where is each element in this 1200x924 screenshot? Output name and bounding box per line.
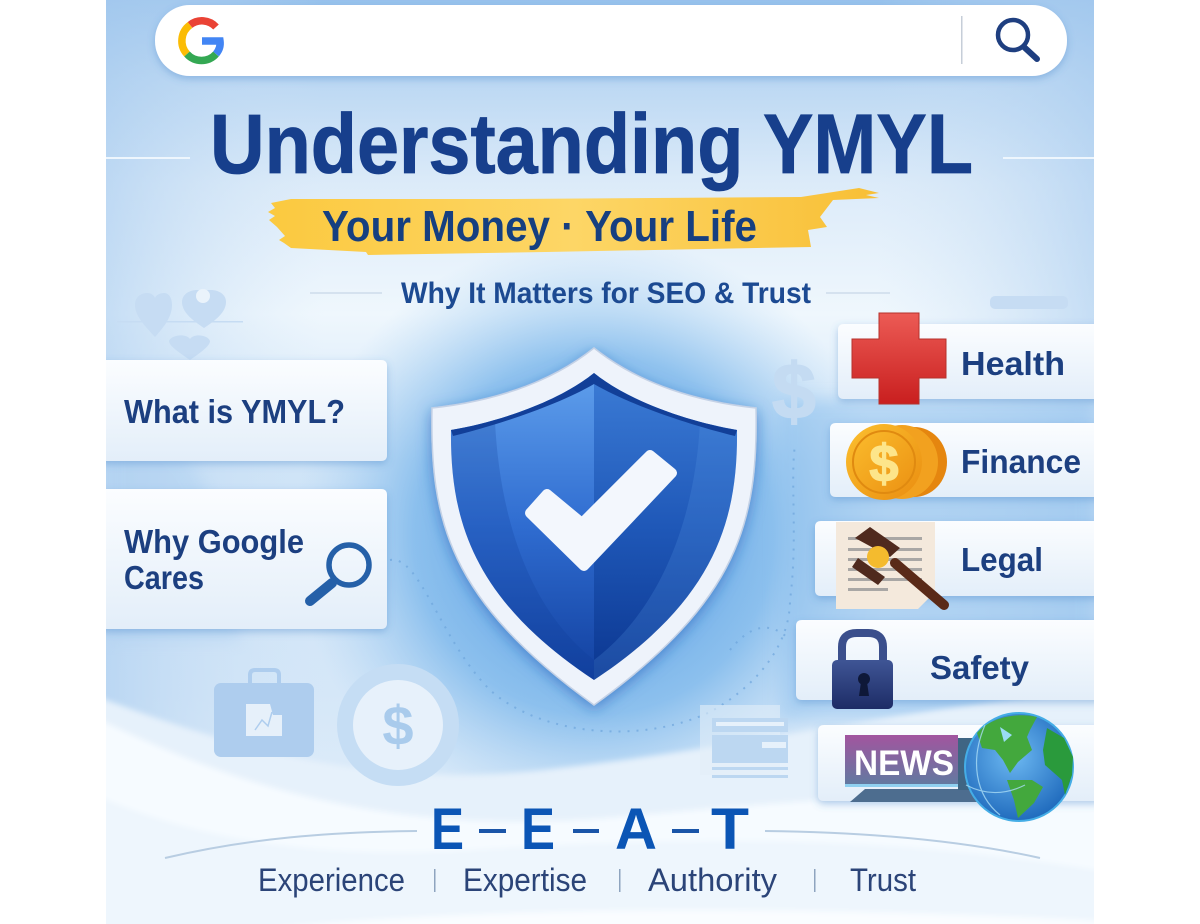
- icon: news banner: [845, 735, 988, 802]
- search bar: [155, 5, 1067, 76]
- row: Safety: [796, 620, 1100, 709]
- panel: Why Google Cares: Why Google: [124, 523, 304, 560]
- row: Legal: [815, 521, 1100, 609]
- E-E-A-T heading: E: [431, 797, 464, 862]
- subtitle on yellow brush: [268, 188, 879, 255]
- row: News: [818, 713, 1100, 821]
- E-E-A-T labels: [260, 868, 916, 898]
- E-E-A-T heading: A: [615, 797, 657, 862]
- icon: gold coins: [846, 424, 947, 500]
- icon: padlock: [832, 633, 893, 709]
- check mark: [530, 455, 672, 566]
- faint coin: $: [382, 694, 414, 757]
- icon: search magnifier: [998, 20, 1037, 59]
- faint briefcase: [214, 670, 314, 757]
- row: Safety: Safety: [930, 649, 1030, 686]
- title: Understanding YMYL: [210, 97, 973, 191]
- icon: globe: [965, 713, 1073, 821]
- icon: magnifier: [310, 545, 369, 601]
- panel: What is YMYL: What is YMYL?: [124, 393, 345, 430]
- icon: news banner: NEWS: [854, 744, 954, 783]
- panel: Why Google Cares: Cares: [124, 559, 204, 596]
- panel: Why Google Cares: [100, 489, 387, 629]
- E-E-A-T labels: Authority: [648, 862, 777, 898]
- faint dollar: $: [772, 347, 816, 435]
- E-E-A-T heading: T: [711, 797, 749, 862]
- faint document: [700, 705, 788, 778]
- icon: red cross: [852, 313, 946, 404]
- E-E-A-T heading: [164, 808, 1040, 859]
- E-E-A-T heading: E: [521, 797, 555, 862]
- icon: Google G: [182, 21, 220, 60]
- tagline: Why It Matters for SEO & Trust: [401, 277, 811, 310]
- icon: gold coins: $: [870, 435, 899, 493]
- E-E-A-T labels: Trust: [850, 862, 916, 898]
- icon: gavel on document: [836, 522, 944, 609]
- faint background icons: [117, 289, 1068, 360]
- row: Finance: Finance: [961, 443, 1081, 480]
- row: Health: Health: [961, 345, 1065, 382]
- E-E-A-T labels: Experience: [258, 862, 405, 898]
- dotted orbit lines: [390, 445, 795, 731]
- row: Finance: [830, 423, 1100, 500]
- E-E-A-T labels: Expertise: [463, 862, 587, 898]
- subtitle on yellow brush: Your Money · Your Life: [322, 202, 757, 251]
- shield with check mark: [432, 348, 756, 705]
- faint coin: [337, 664, 459, 786]
- row: Legal: Legal: [961, 541, 1043, 578]
- row: Health: [838, 313, 1100, 404]
- panel: What is YMYL: [100, 360, 387, 461]
